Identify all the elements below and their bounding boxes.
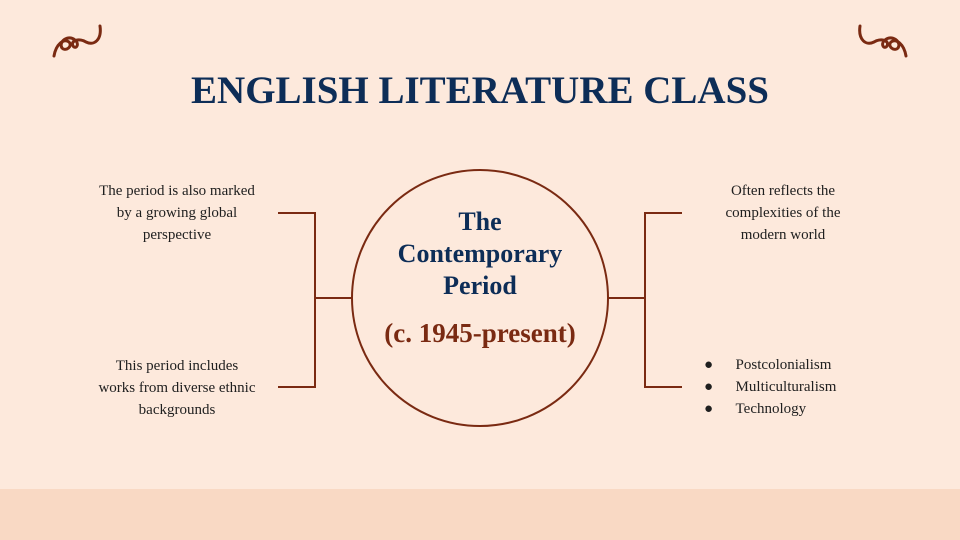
center heading: Period [443, 271, 517, 300]
text: complexities: Often reflects the complexities of the modern world [726, 183, 840, 243]
text: diverse backgrounds: This period includes works from diverse ethnic backgrounds [98, 358, 256, 418]
title: ENGLISH LITERATURE CLASS [191, 69, 769, 112]
bullet list: ● Multiculturalism [704, 379, 836, 395]
bullet list [704, 357, 836, 417]
center heading: Contemporary [398, 239, 562, 268]
icon: swirl right [858, 24, 908, 58]
bullet list: ● Technology [704, 401, 806, 417]
center heading [398, 207, 562, 300]
icon: swirl left [52, 24, 102, 58]
center heading: The [458, 207, 502, 236]
text: global perspective: The period is also marked by a growing global perspective [99, 183, 255, 243]
center date: (c. 1945-present) [384, 318, 576, 348]
bottom band [0, 489, 960, 540]
bullet list: ● Postcolonialism [704, 357, 831, 373]
